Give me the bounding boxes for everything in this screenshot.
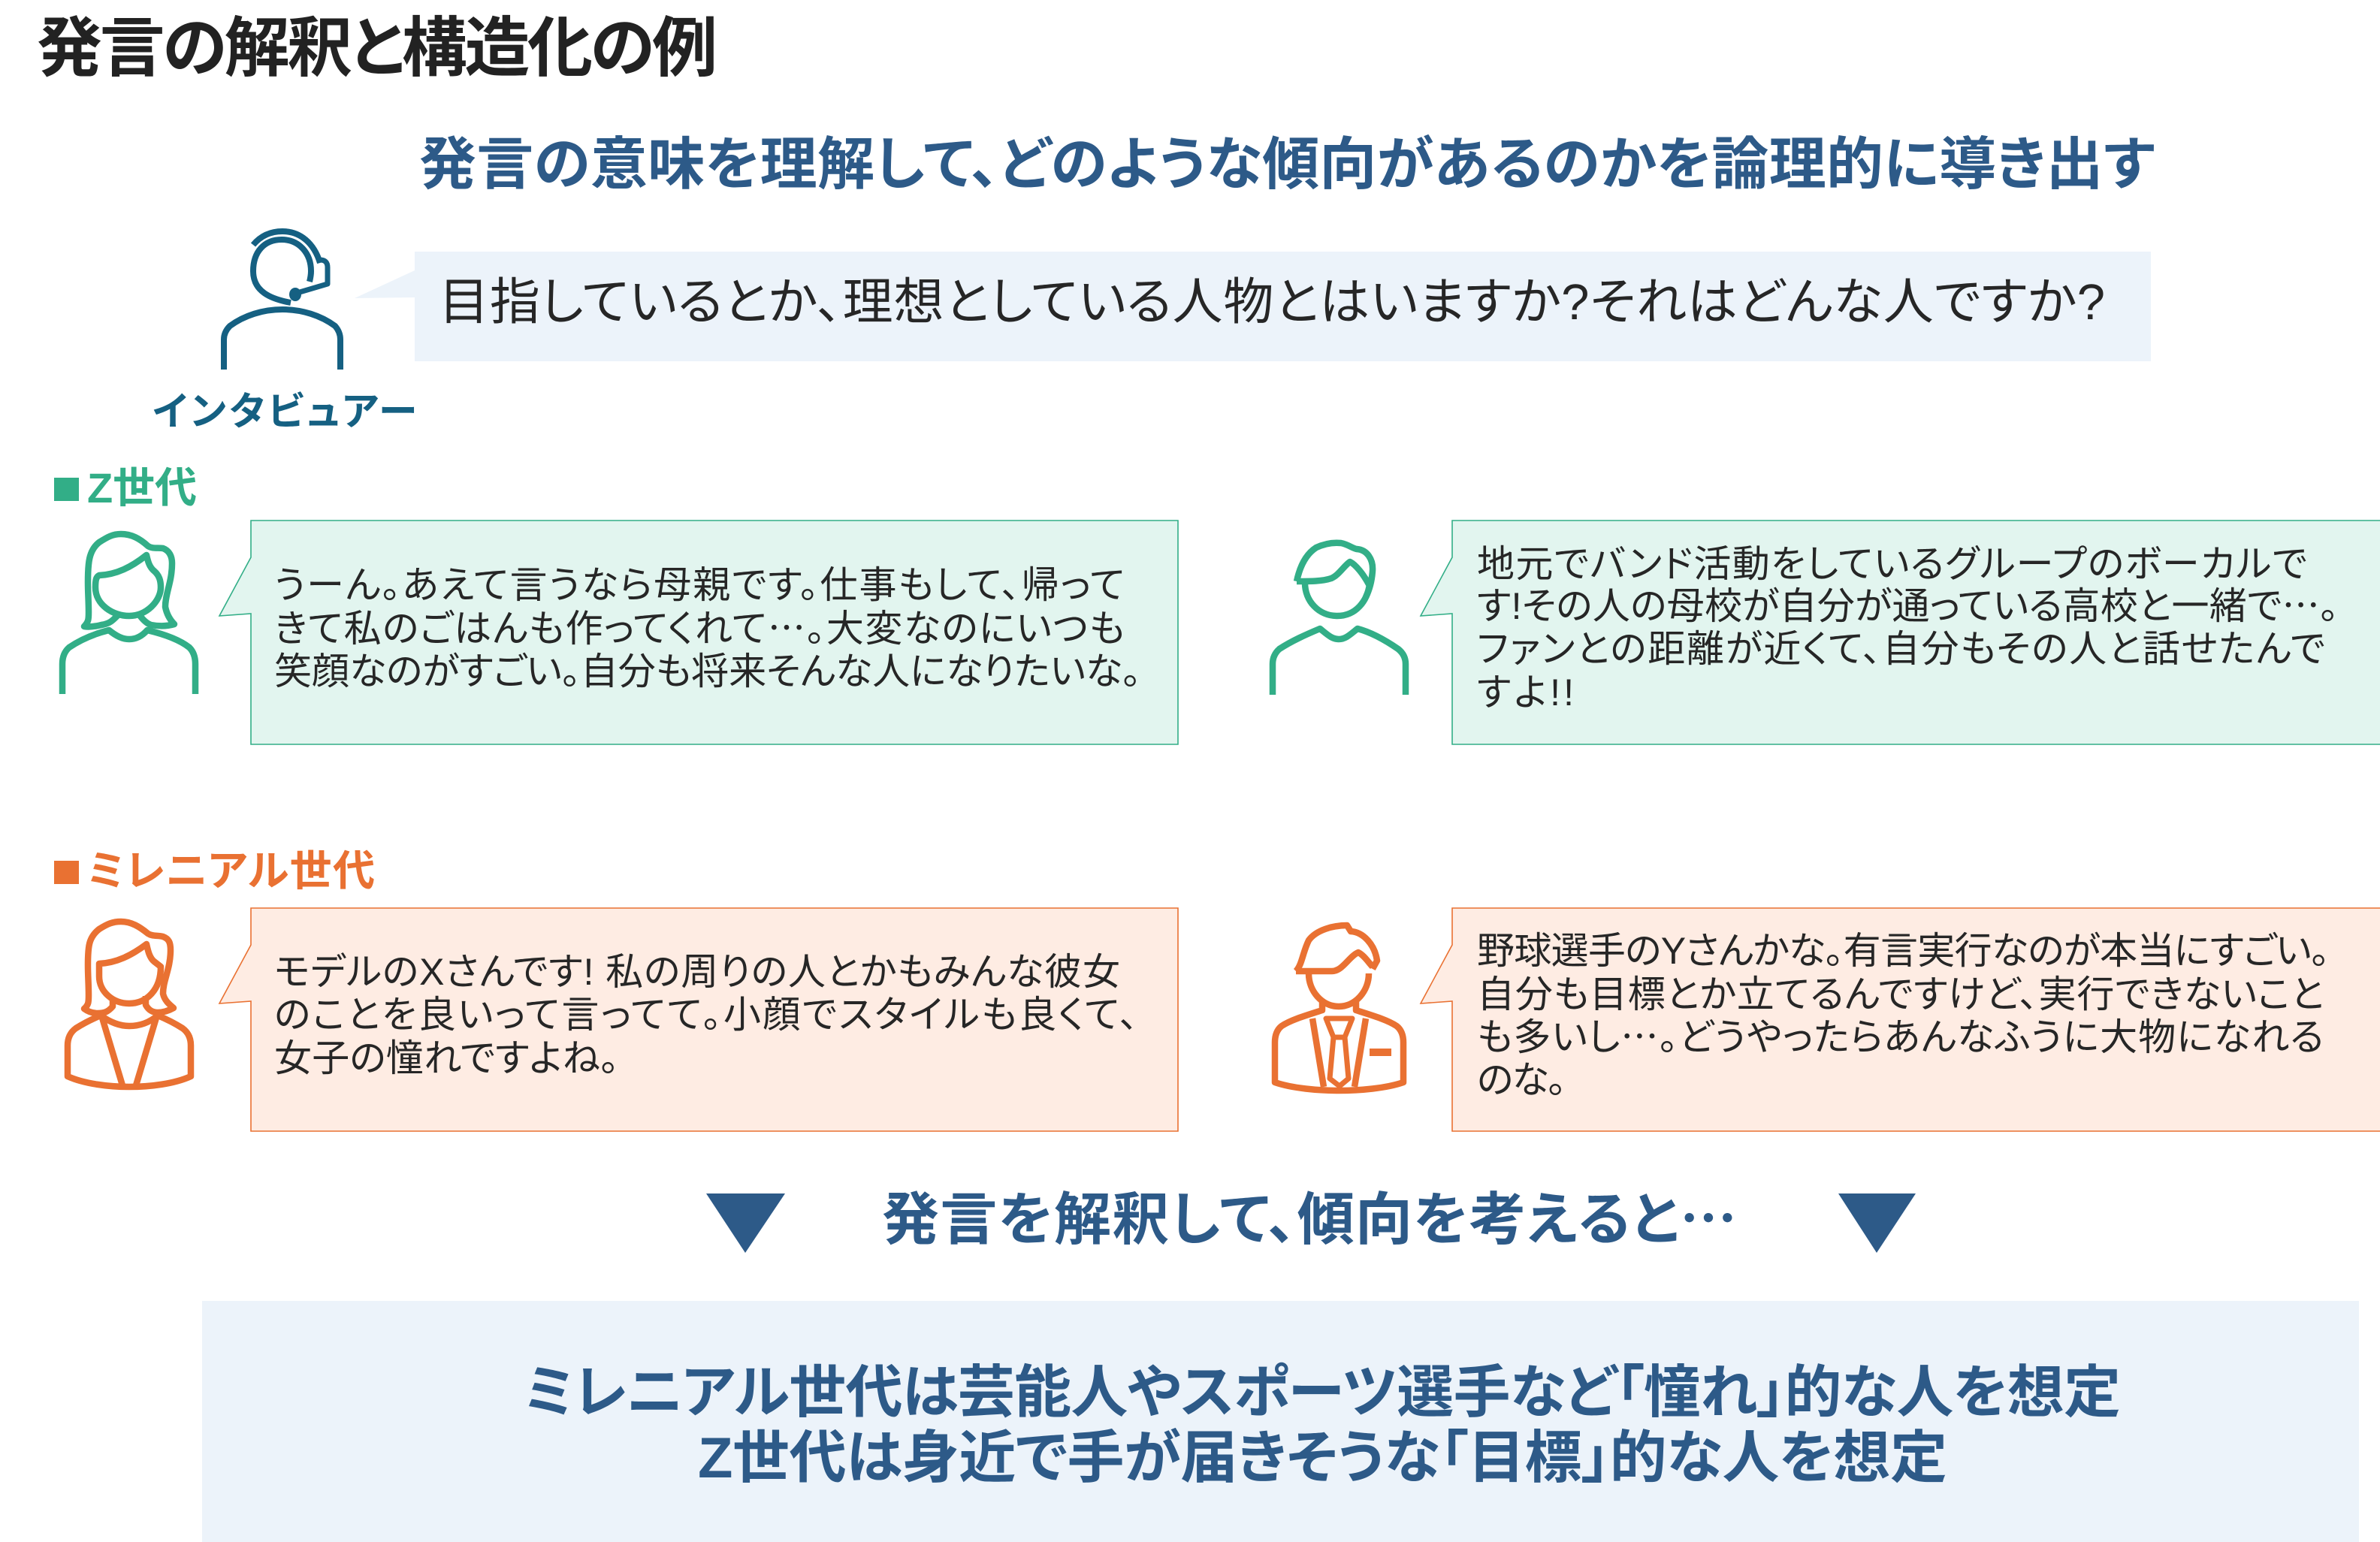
arrow: left down triangle [706, 1193, 785, 1253]
speech bubble: Millennial woman [219, 908, 1178, 1131]
speech bubble: Gen Z woman: きて私のごはんも作ってくれて…。大変なのにいつも [274, 599, 1125, 653]
conclusion panel: ミレニアル世代は芸能人やスポーツ選手など「憧れ」的な人を想定 [524, 1361, 2121, 1425]
speech bubble: Gen Z man: す!その人の母校が自分が通っている高校と一緒で…。 [1477, 576, 2339, 630]
icon: Gen Z man [1273, 543, 1406, 695]
speech bubble: Millennial man: 野球選手のYさんかな。有言実行なのが本当にすごい。 [1477, 930, 2330, 972]
interviewer speech bubble: 目指しているとか、理想としている人物とはいますか?それはどんな人ですか? [439, 274, 2105, 330]
arrow: right down triangle [1838, 1193, 1916, 1253]
speech bubble: Gen Z woman: うーん。あえて言うなら母親です。仕事もして、帰って [274, 564, 1125, 606]
speech bubble: Millennial man: 自分も目標とか立てるんですけど、実行できないこと [1477, 973, 2324, 1015]
speech bubble: Gen Z man: すよ!! [1477, 671, 1574, 714]
conclusion panel: Z世代は身近で手が届きそうな「目標」的な人を想定 [698, 1426, 1947, 1490]
transition text: 発言を解釈して、傾向を考えると… [882, 1173, 1737, 1256]
title: 発言の解釈と構造化の例 [37, 12, 717, 85]
label: interviewer: インタビュアー [153, 391, 417, 434]
icon: Millennial man in suit [1275, 925, 1403, 1091]
speech bubble: Gen Z man: 地元でバンド活動をしているグループのボーカルで [1477, 543, 2307, 585]
heading: Generation Z: Z世代 [87, 464, 197, 511]
speech bubble: Gen Z woman [219, 521, 1178, 744]
speech bubble: Millennial woman: のことを良いって言ってて。小顔でスタイルも良くて、 [274, 994, 1138, 1036]
speech bubble: Gen Z man: ファンとの距離が近くて、自分もその人と話せたんで [1477, 628, 2325, 670]
speech bubble: Gen Z woman: 笑顔なのがすごい。自分も将来そんな人になりたいな。 [274, 650, 1141, 693]
speech bubble: Gen Z man [1421, 521, 2380, 744]
speech bubble: Millennial man: のな。 [1477, 1059, 1566, 1101]
heading: derive tendencies: 発言の意味を理解して、どのような傾向があるのかを論理的に導き出す [419, 133, 2155, 197]
speech bubble: Millennial woman: 女子の憧れですよね。 [274, 1037, 619, 1079]
heading: Millennial generation: ミレニアル世代 [87, 847, 375, 895]
speech bubble: Millennial woman: モデルのXさんです! 私の周りの人とかもみんな彼女 [274, 951, 1120, 993]
icon: Millennial woman [68, 922, 191, 1087]
icon: Gen Z woman [62, 534, 195, 694]
conclusion panel [202, 1301, 2359, 1542]
icon: interviewer with headset [224, 231, 340, 370]
interviewer speech bubble [355, 252, 2151, 361]
speech bubble: Millennial man [1421, 908, 2380, 1131]
speech bubble: Millennial man: も多いし…。どうやったらあんなふうに大物になれる [1477, 1007, 2324, 1061]
